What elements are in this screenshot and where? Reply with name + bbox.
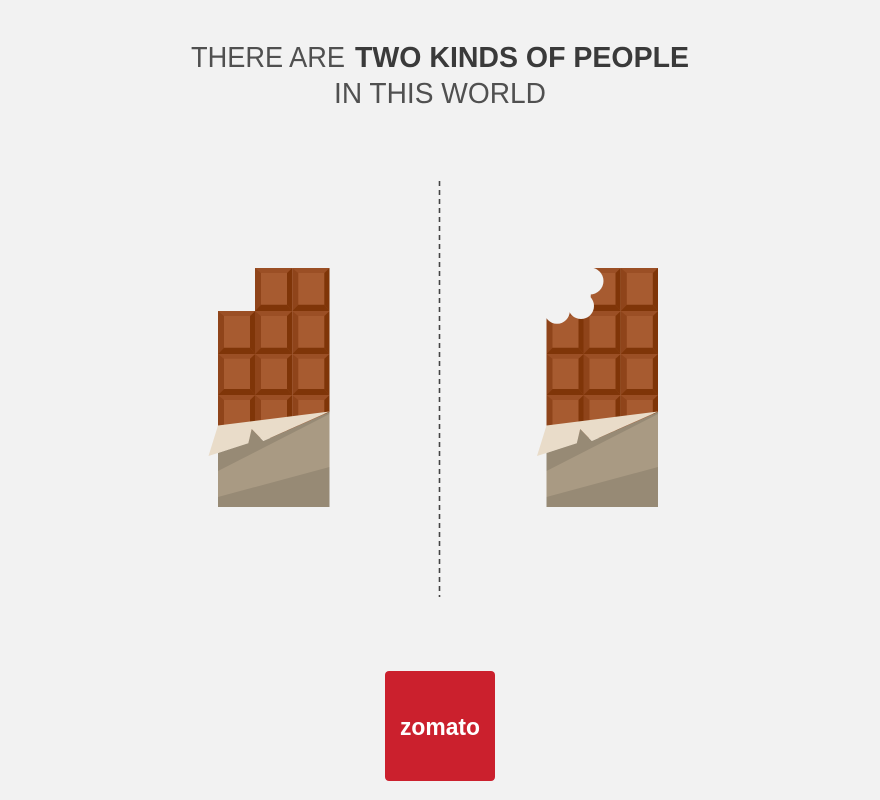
divider: dashed line	[438, 181, 440, 597]
wrapper	[537, 412, 658, 507]
chocolate pieces	[218, 268, 330, 438]
title: THERE ARE	[191, 42, 345, 74]
title	[191, 42, 689, 110]
left chocolate bar: neatly broken piece	[208, 268, 330, 507]
chocolate pieces	[546, 268, 658, 438]
wrapper	[208, 412, 330, 507]
zomato logo: zomato	[400, 714, 480, 741]
title: TWO KINDS OF PEOPLE	[355, 42, 689, 74]
zomato logo	[385, 671, 495, 781]
right chocolate bar: bitten corner	[537, 266, 658, 507]
bite marks	[544, 266, 604, 324]
title: IN THIS WORLD	[334, 78, 546, 110]
